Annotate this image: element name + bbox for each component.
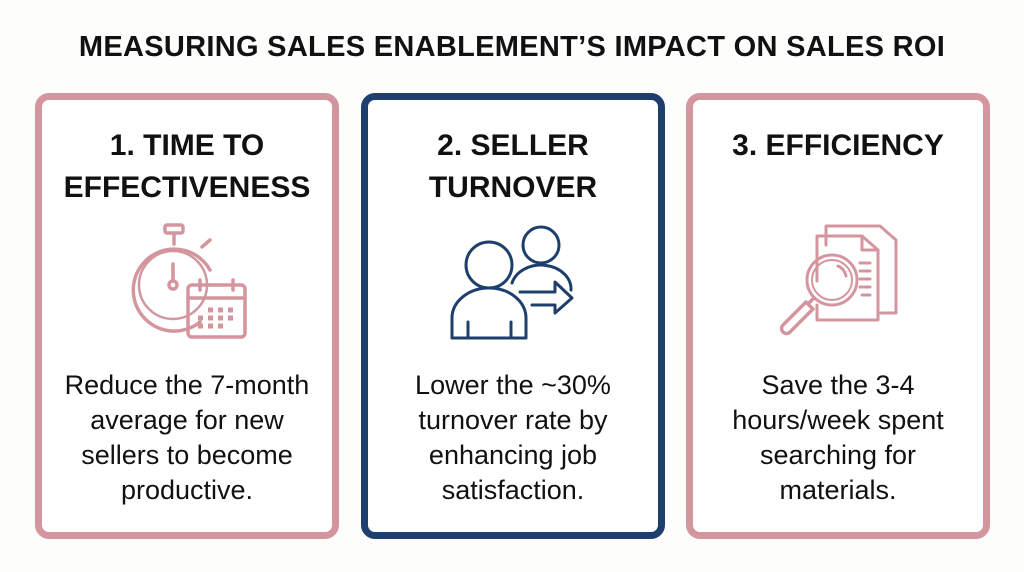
heading 3: 3. EFFICIENCY (732, 129, 944, 162)
heading 1: EFFECTIVENESS (64, 171, 310, 204)
body text 1: productive. (121, 475, 253, 505)
body text 1: Reduce the 7-month (65, 370, 309, 400)
body text 2: turnover rate by (418, 405, 608, 435)
panel: time to effectiveness (35, 93, 339, 539)
body text 3: hours/week spent (732, 405, 944, 435)
icon: people with arrow (450, 226, 574, 340)
heading 1 (64, 129, 310, 204)
body text 2: enhancing job (429, 440, 597, 470)
body text 1: sellers to become (81, 440, 293, 470)
heading 2: 2. SELLER (437, 129, 589, 162)
title: MEASURING SALES ENABLEMENT’S IMPACT ON SALES ROI (79, 31, 945, 63)
body text 2 (415, 370, 611, 505)
body text 3: searching for (760, 440, 916, 470)
body text 2: Lower the ~30% (415, 370, 611, 400)
body text 3 (732, 370, 944, 505)
heading 2: TURNOVER (429, 171, 597, 204)
body text 1: average for new (90, 405, 284, 435)
panel: efficiency (686, 93, 990, 539)
heading 1: 1. TIME TO (110, 129, 264, 162)
icon: documents and magnifier (780, 224, 898, 336)
panel: seller turnover (361, 93, 665, 539)
body text 1 (65, 370, 309, 505)
heading 2 (429, 129, 597, 204)
body text 3: materials. (779, 475, 897, 505)
body text 3: Save the 3-4 (761, 370, 915, 400)
body text 2: satisfaction. (442, 475, 584, 505)
icon: stopwatch and calendar (132, 223, 247, 339)
